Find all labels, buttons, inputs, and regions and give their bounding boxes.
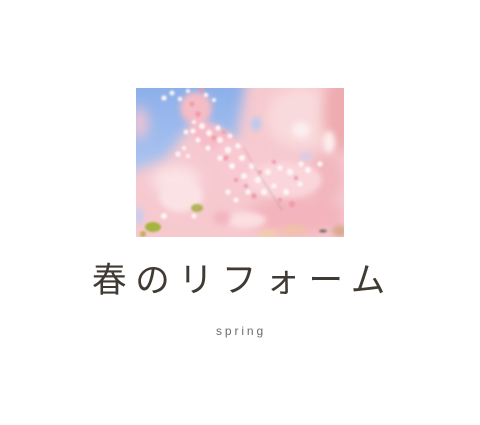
foliage [140,204,327,237]
photo: pink cherry blossoms against blue sky [136,88,344,237]
blossom clusters [161,88,323,219]
title: 春のリフォーム [92,252,394,302]
subtitle: spring [216,324,266,338]
